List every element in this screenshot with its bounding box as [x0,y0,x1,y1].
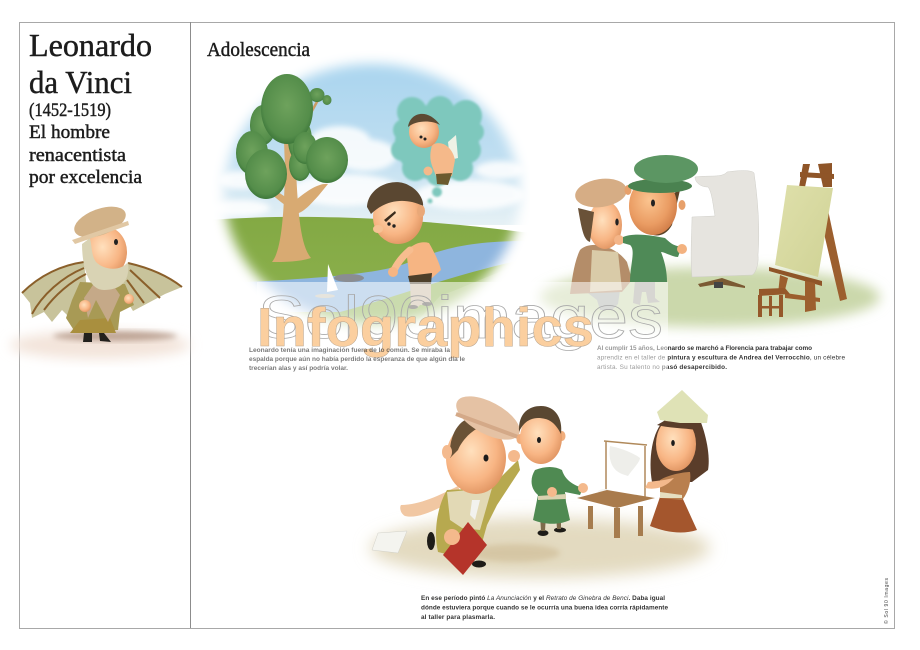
stool [758,288,790,317]
running Leonardo [400,387,526,575]
ground [370,518,710,578]
sidebar title block [29,27,152,188]
caption 3: al taller para plasmarla. [421,614,495,621]
scene 3: running to the workshop [370,387,710,578]
tools [698,278,745,288]
caption 2: artista. Su talento no pasó desapercibido. [597,364,727,371]
caption 1: Leonardo tenía una imaginación fuera de lo común. Se miraba la [249,347,450,354]
apprentice boy [516,406,588,536]
caption 3: dónde estuviera porque cuando se le ocurría una buena idea corría rápidamente [421,604,668,612]
subtitle line 3: por excelencia [29,167,143,188]
heading: Adolescencia: Adolescencia [207,39,310,61]
title second line: da Vinci [29,64,132,100]
canvas [775,185,833,277]
easel [769,163,847,312]
table with drying rack [577,441,655,538]
paper [372,531,407,553]
rocks [334,274,364,282]
watermark [257,282,668,374]
title: Leonardo [29,27,152,63]
watermark orange text: Infographics [257,296,594,358]
dates: (1452-1519) [29,100,111,121]
subtitle line 1: El hombre [29,122,110,143]
sailboat [315,264,338,298]
red book [443,522,487,575]
thought bubble [391,96,484,204]
watermark outlined text: Sol90images [258,284,663,351]
caption 1: espalda porque aún no había perdido la esperanza de que algún día le [249,356,465,363]
boy [367,182,441,309]
caption 1: trecerían alas y así podría volar. [249,365,348,372]
tree [236,74,348,262]
illustration: old Leonardo with wings [10,201,190,359]
caption 2: aprendiz en el taller de pintura y escultura de Andrea del Verrocchio, un célebre [597,354,845,362]
sky and landscape [217,56,525,332]
caption 2: Al cumplir 15 años, Leonardo se marchó a Florencia para trabajar como [597,345,812,352]
caption 2 fade [596,342,668,372]
subtitle line 2: renacentista [29,145,127,166]
scene 1: boy by the river dreaming of wings [217,56,525,332]
caption 3: En ese período pintó La Anunciación y el Retrato de Ginebra de Benci. Daba igual [421,595,665,602]
Verrocchio with green hat [623,155,698,305]
woman with cone hat [645,390,709,533]
ground [540,267,880,327]
statue [691,171,759,277]
young Leonardo with beret [570,176,632,310]
scene 2: apprentice in Verrocchio's workshop [540,155,880,327]
credit: © Sol 90 Images [883,578,890,624]
